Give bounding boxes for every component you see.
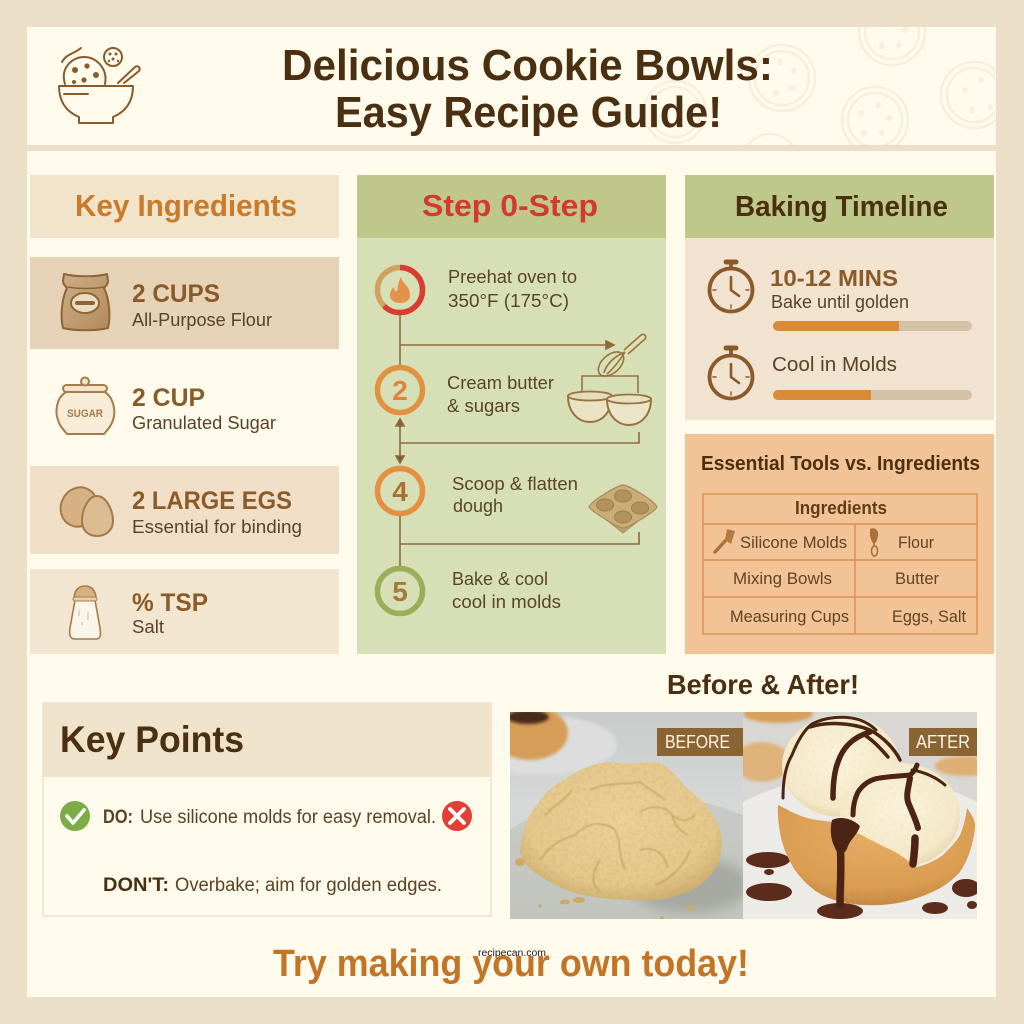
- timeline item: bake: 10-12 MINS: [770, 265, 898, 291]
- title: Delicious Cookie Bowls:: [282, 41, 773, 90]
- chocolate spills: [746, 852, 980, 919]
- heading: key points: [43, 703, 491, 777]
- label: after: [909, 728, 977, 756]
- don't text: Overbake; aim for golden edges.: [175, 875, 442, 896]
- call to action: Try making your own today!: [273, 943, 749, 985]
- heading: key points: Key Points: [60, 719, 244, 760]
- timeline item: bake: Bake until golden: [771, 292, 909, 312]
- step 2: 2: [392, 375, 408, 406]
- ingredient: sugar: Granulated Sugar: [132, 413, 276, 433]
- ingredient: salt: % TSP: [132, 589, 208, 617]
- ingredient: flour: 2 CUPS: [132, 280, 220, 308]
- table: Ingredients: [795, 498, 887, 518]
- table: Mixing Bowls: [733, 569, 832, 588]
- chocolate drizzle: [783, 717, 945, 905]
- icon: muffin mold: [589, 485, 657, 533]
- panel: tools vs ingredients: [685, 434, 994, 654]
- icon: stopwatch: [710, 348, 752, 398]
- panel: steps: [357, 175, 666, 654]
- heading: baking timeline: [685, 175, 994, 238]
- table: Measuring Cups: [730, 607, 849, 626]
- step 2: [378, 334, 651, 425]
- heading: steps: [357, 175, 666, 238]
- main content panel: [27, 151, 996, 997]
- ingredient: sugar: [57, 378, 276, 434]
- heading: steps: Step 0-Step: [422, 188, 598, 223]
- icon: green check: [60, 801, 90, 831]
- panel: key points: [43, 703, 491, 916]
- do text: Use silicone molds for easy removal.: [140, 807, 436, 828]
- ice cream scoops: [782, 715, 960, 867]
- ingredient: eggs: Essential for binding: [132, 517, 302, 537]
- step 5: 5: [392, 576, 408, 607]
- do text: DO:: [103, 807, 133, 828]
- photo: after, filled cookie bowl: [743, 712, 977, 919]
- step 4: 4: [392, 476, 408, 507]
- table: Silicone Molds: [740, 533, 847, 552]
- ingredient: eggs: 2 LARGE EGS: [132, 487, 292, 515]
- watermark: recipecan.com: [478, 948, 546, 959]
- timeline item: cool: Cool in Molds: [772, 354, 897, 376]
- heading: key ingredients: Key Ingredients: [75, 188, 297, 223]
- table: Butter: [895, 569, 939, 588]
- step 1: Preehat oven to: [448, 266, 577, 287]
- heading: key ingredients: [30, 175, 339, 238]
- panel: baking timeline: [685, 175, 994, 420]
- step 4: dough: [453, 495, 503, 516]
- background cookie pattern: [644, 27, 996, 145]
- title: Easy Recipe Guide!: [335, 88, 722, 137]
- table: Flour: [898, 533, 934, 552]
- heading: baking timeline: Baking Timeline: [735, 191, 948, 223]
- label: before: [657, 728, 743, 756]
- step 2: & sugars: [447, 395, 520, 416]
- ingredient: sugar: 2 CUP: [132, 384, 205, 412]
- icon: stopwatch: [710, 262, 752, 312]
- step 1: [378, 266, 577, 313]
- table: [703, 494, 977, 634]
- timeline item: bake: [710, 262, 972, 331]
- step 5: cool in molds: [452, 591, 561, 612]
- ingredient: flour: All-Purpose Flour: [132, 310, 272, 330]
- heading: before and after: Before & After!: [667, 669, 859, 700]
- step 5: [378, 568, 561, 614]
- icon: flame ring: [378, 268, 423, 313]
- step 5: Bake & cool: [452, 568, 548, 589]
- label: before: BEFORE: [665, 732, 730, 752]
- icon: salt shaker: [70, 586, 101, 639]
- connector lines and arrows: [396, 315, 639, 566]
- title: [282, 41, 773, 137]
- step 4: Scoop & flatten: [452, 473, 578, 494]
- icon: whisk: [870, 528, 878, 556]
- icon: spatula: [715, 529, 735, 552]
- label: after: AFTER: [916, 732, 970, 752]
- heading: tools vs ingredients: Essential Tools vs. Ingredients: [701, 453, 980, 475]
- chocolate drip blob: [831, 818, 860, 854]
- cookie bowl: [778, 805, 975, 905]
- header panel: [27, 27, 996, 145]
- icon: eggs: [54, 481, 113, 536]
- step 2: Cream butter: [447, 372, 554, 393]
- icon: sugar jar: [57, 378, 114, 434]
- progress bar: [773, 390, 972, 400]
- ingredient: salt: Salt: [132, 617, 164, 637]
- icon: bowl with cookie: [59, 48, 140, 123]
- icon: sugar jar: SUGAR: [67, 408, 103, 420]
- ingredient: salt: [30, 569, 339, 654]
- progress bar: [773, 321, 972, 331]
- step 4: [378, 468, 657, 533]
- step 1: 350°F (175°C): [448, 290, 569, 311]
- table: Eggs, Salt: [892, 607, 966, 626]
- ingredient: flour: [30, 257, 339, 349]
- ingredient: eggs: [30, 466, 339, 554]
- dough ball: [520, 762, 722, 900]
- photo: before, raw dough: [510, 712, 743, 919]
- panel: key ingredients: [30, 175, 339, 654]
- icon: whisk and bowls: [568, 334, 651, 425]
- icon: flour sack: [62, 274, 109, 330]
- timeline item: cool: [710, 348, 972, 400]
- icon: red cross: [442, 801, 472, 831]
- don't text: DON'T:: [103, 875, 169, 896]
